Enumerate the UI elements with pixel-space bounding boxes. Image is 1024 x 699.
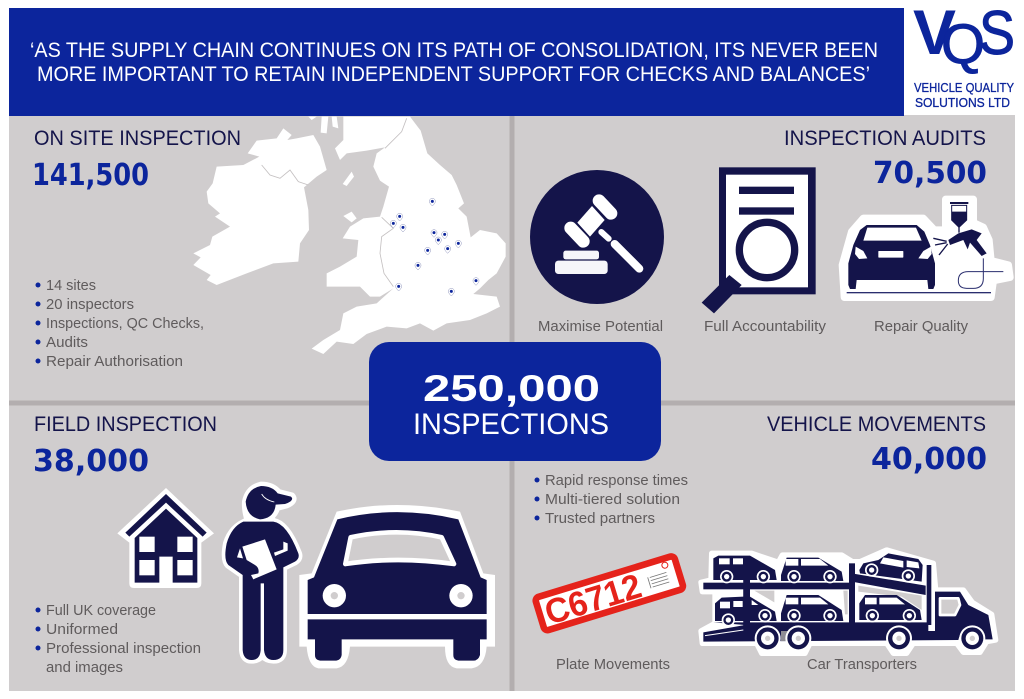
loaded cars [713,553,923,621]
bullet list: on site: Audits [46,335,88,351]
icon: car transporter truck [701,550,996,653]
number: 38,000: 38,000 [33,444,149,479]
total number: 250,000 [423,368,600,409]
label: full accountability: Full Accountability [704,319,827,335]
logo: VQS [913,0,1015,110]
panel: vehicle movements [534,413,996,673]
label: maximise potential: Maximise Potential [538,319,663,335]
label: car transporters: Car Transporters [807,657,917,673]
bullet list: vehicle movements: Trusted partners [545,511,655,527]
site pins [390,198,479,296]
total label: INSPECTIONS [413,408,609,441]
bullet list: on site: Repair Authorisation [46,354,183,370]
panel: field inspection [33,413,495,676]
logo: VQS: Q [941,12,985,75]
header quote: MORE IMPORTANT TO RETAIN INDEPENDENT SUPPORT FOR CHECKS AND BALANCES’ [37,63,870,86]
logo: VQS: V [913,0,956,68]
number: 40,000: 40,000 [871,442,987,477]
header banner [9,8,904,116]
logo: VQS: S [979,0,1015,68]
header quote: ‘AS THE SUPPLY CHAIN CONTINUES ON ITS PATH OF CONSOLIDATION, ITS NEVER BEEN [30,39,878,62]
heading: field inspection: FIELD INSPECTION [34,413,217,436]
car wheels [720,563,916,627]
bullet list: field: Professional inspection [46,641,201,657]
heading: inspection audits: INSPECTION AUDITS [784,127,986,150]
bullet list: field [36,603,201,676]
icon: registration plate: C6712 [541,567,646,633]
icon: inspector with clipboard [225,485,299,660]
map of UK and Ireland [193,117,506,354]
heading: on site inspection: ON SITE INSPECTION [34,127,241,150]
bullet list: on site [36,278,204,370]
panel: inspection audits [530,127,1010,335]
header quote [30,39,878,86]
bullet list: on site: 14 sites [46,278,96,294]
icon: car front [299,505,495,668]
number: 70,500: 70,500 [873,156,987,191]
bullet list: field: and images [46,660,123,676]
bullet list: vehicle movements [534,473,688,527]
truck frame [703,563,993,642]
number: 141,500: 141,500 [32,158,149,193]
bullet list: on site: Inspections, QC Checks, [46,316,204,332]
truck wheels [755,625,985,651]
icon: car being spray painted [842,199,1010,297]
heading: vehicle movements: VEHICLE MOVEMENTS [767,413,986,436]
icon: gavel [530,170,664,304]
label: plate movements: Plate Movements [556,657,670,673]
central total callout [369,342,661,461]
bullet list: on site: 20 inspectors [46,297,134,313]
bullet list: field: Uniformed [46,622,118,638]
bullet list: field: Full UK coverage [46,603,156,619]
icon: document with magnifying glass [702,167,816,313]
logo: VQS: VEHICLE QUALITY [914,81,1015,95]
panel: on site inspection [32,117,506,370]
bullet list: vehicle movements: Multi-tiered solution [545,492,680,508]
label: repair quality: Repair Quality [874,319,969,335]
bullet list: vehicle movements: Rapid response times [545,473,688,489]
logo: VQS: SOLUTIONS LTD [915,96,1010,110]
icon: registration plate [535,556,685,634]
icon: house [117,488,214,588]
gaps between decks [754,566,946,614]
